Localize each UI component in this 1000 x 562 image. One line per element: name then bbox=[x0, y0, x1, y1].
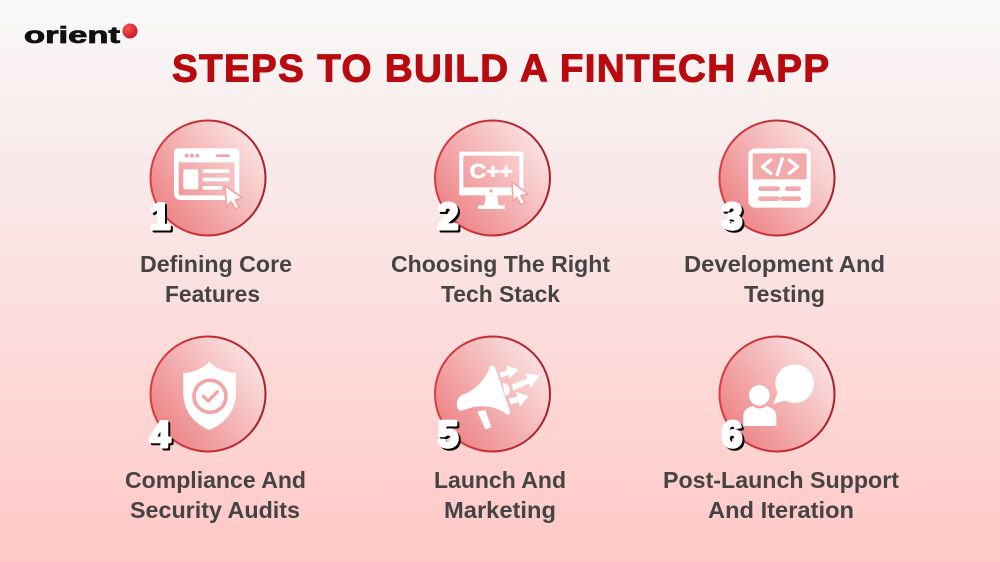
label 4: Compliance And bbox=[125, 467, 306, 493]
icon: person with speech bubble bbox=[743, 364, 814, 426]
number 6: 6 bbox=[724, 416, 744, 457]
label 2 bbox=[391, 251, 610, 307]
circle 3 bbox=[720, 120, 834, 236]
number 2: 2 bbox=[440, 198, 460, 239]
panel: step 4 bbox=[125, 336, 306, 523]
label 5: Launch And bbox=[434, 467, 566, 493]
number 1: 1 bbox=[152, 198, 172, 239]
icon: monitor with C++ and cursor bbox=[459, 154, 528, 209]
logo: orient bbox=[24, 22, 138, 48]
panel: step 5 bbox=[434, 336, 566, 523]
label 3 bbox=[684, 251, 885, 307]
circle 5 bbox=[435, 336, 550, 452]
circle 1 bbox=[150, 120, 266, 236]
number 3: 3 bbox=[724, 198, 744, 239]
label 1: Features bbox=[165, 281, 260, 307]
label 6: And Iteration bbox=[708, 497, 854, 523]
label 6 bbox=[663, 467, 899, 523]
number 5: 5 bbox=[438, 414, 458, 455]
label 4 bbox=[125, 467, 306, 523]
icon: browser window with cursor bbox=[174, 148, 243, 209]
number 3: 3 bbox=[722, 196, 742, 237]
title: STEPS TO BUILD A FINTECH APP bbox=[172, 48, 829, 90]
circle 2 bbox=[435, 120, 550, 236]
label 6: Post-Launch Support bbox=[663, 467, 899, 493]
panel: step 3 bbox=[684, 120, 885, 307]
label 2: Tech Stack bbox=[441, 281, 560, 307]
label 4: Security Audits bbox=[130, 497, 300, 523]
circle 4 bbox=[150, 336, 266, 452]
number 1: 1 bbox=[150, 196, 170, 237]
label 1 bbox=[140, 251, 292, 307]
icon: monitor with C++ and cursor: C++ bbox=[470, 160, 513, 183]
label 5: Marketing bbox=[444, 497, 556, 523]
label 2: Choosing The Right bbox=[391, 251, 610, 277]
label 5 bbox=[434, 467, 566, 523]
panel: step 1 bbox=[140, 120, 292, 307]
panel: step 2 bbox=[391, 120, 610, 307]
circle 6 bbox=[720, 336, 834, 452]
number 5: 5 bbox=[440, 416, 460, 457]
label 3: Development And bbox=[684, 251, 885, 277]
icon: megaphone with arrows bbox=[457, 366, 540, 429]
number 6: 6 bbox=[722, 414, 742, 455]
number 4: 4 bbox=[152, 416, 173, 457]
panel: step 6 bbox=[663, 336, 899, 523]
icon: code window bbox=[748, 148, 811, 208]
logo: orient: orient bbox=[24, 22, 121, 48]
number 4: 4 bbox=[150, 414, 171, 455]
number 2: 2 bbox=[438, 196, 458, 237]
label 1: Defining Core bbox=[140, 251, 292, 277]
label 3: Testing bbox=[744, 281, 825, 307]
icon: shield with check bbox=[183, 361, 236, 430]
